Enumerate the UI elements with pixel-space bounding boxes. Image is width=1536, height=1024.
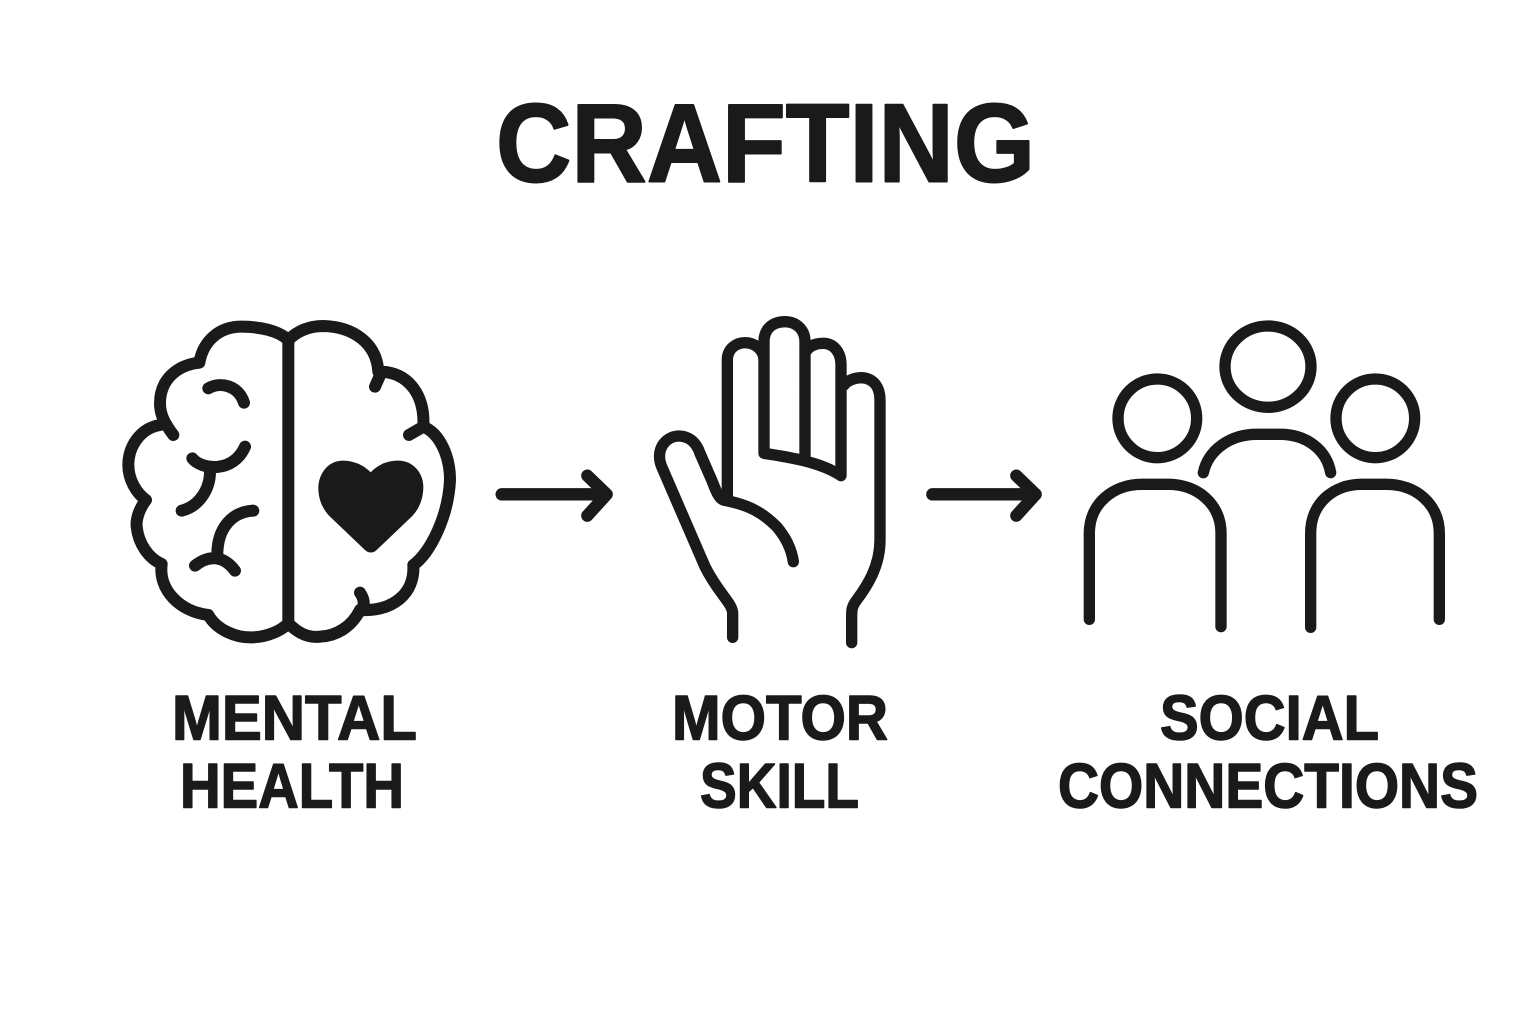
right person — [1311, 379, 1439, 627]
thumb and palm — [660, 436, 793, 637]
label: motor skill: MOTOR — [672, 684, 888, 754]
label: mental health — [172, 684, 417, 822]
icon: raised hand — [660, 322, 880, 643]
label: motor skill: SKILL — [700, 752, 859, 822]
arrow: mental health to motor skill — [502, 476, 607, 516]
label: motor skill — [672, 684, 888, 822]
icon: three people — [1089, 326, 1439, 627]
centre person — [1203, 326, 1331, 473]
arrow: motor skill to social connections — [932, 476, 1036, 516]
brain centre line — [270, 340, 306, 623]
icon: heart — [318, 461, 423, 552]
label: social connections: SOCIAL — [1160, 684, 1379, 754]
label: social connections — [1058, 684, 1478, 822]
brain outline — [128, 326, 450, 637]
title: CRAFTING — [496, 82, 1035, 206]
label: social connections: CONNECTIONS — [1058, 752, 1478, 822]
icon: brain with heart — [128, 326, 450, 637]
left person — [1089, 379, 1221, 627]
fingers — [727, 322, 880, 643]
brain folds — [182, 385, 253, 571]
label: mental health: MENTAL — [172, 684, 417, 754]
label: mental health: HEALTH — [180, 752, 404, 822]
